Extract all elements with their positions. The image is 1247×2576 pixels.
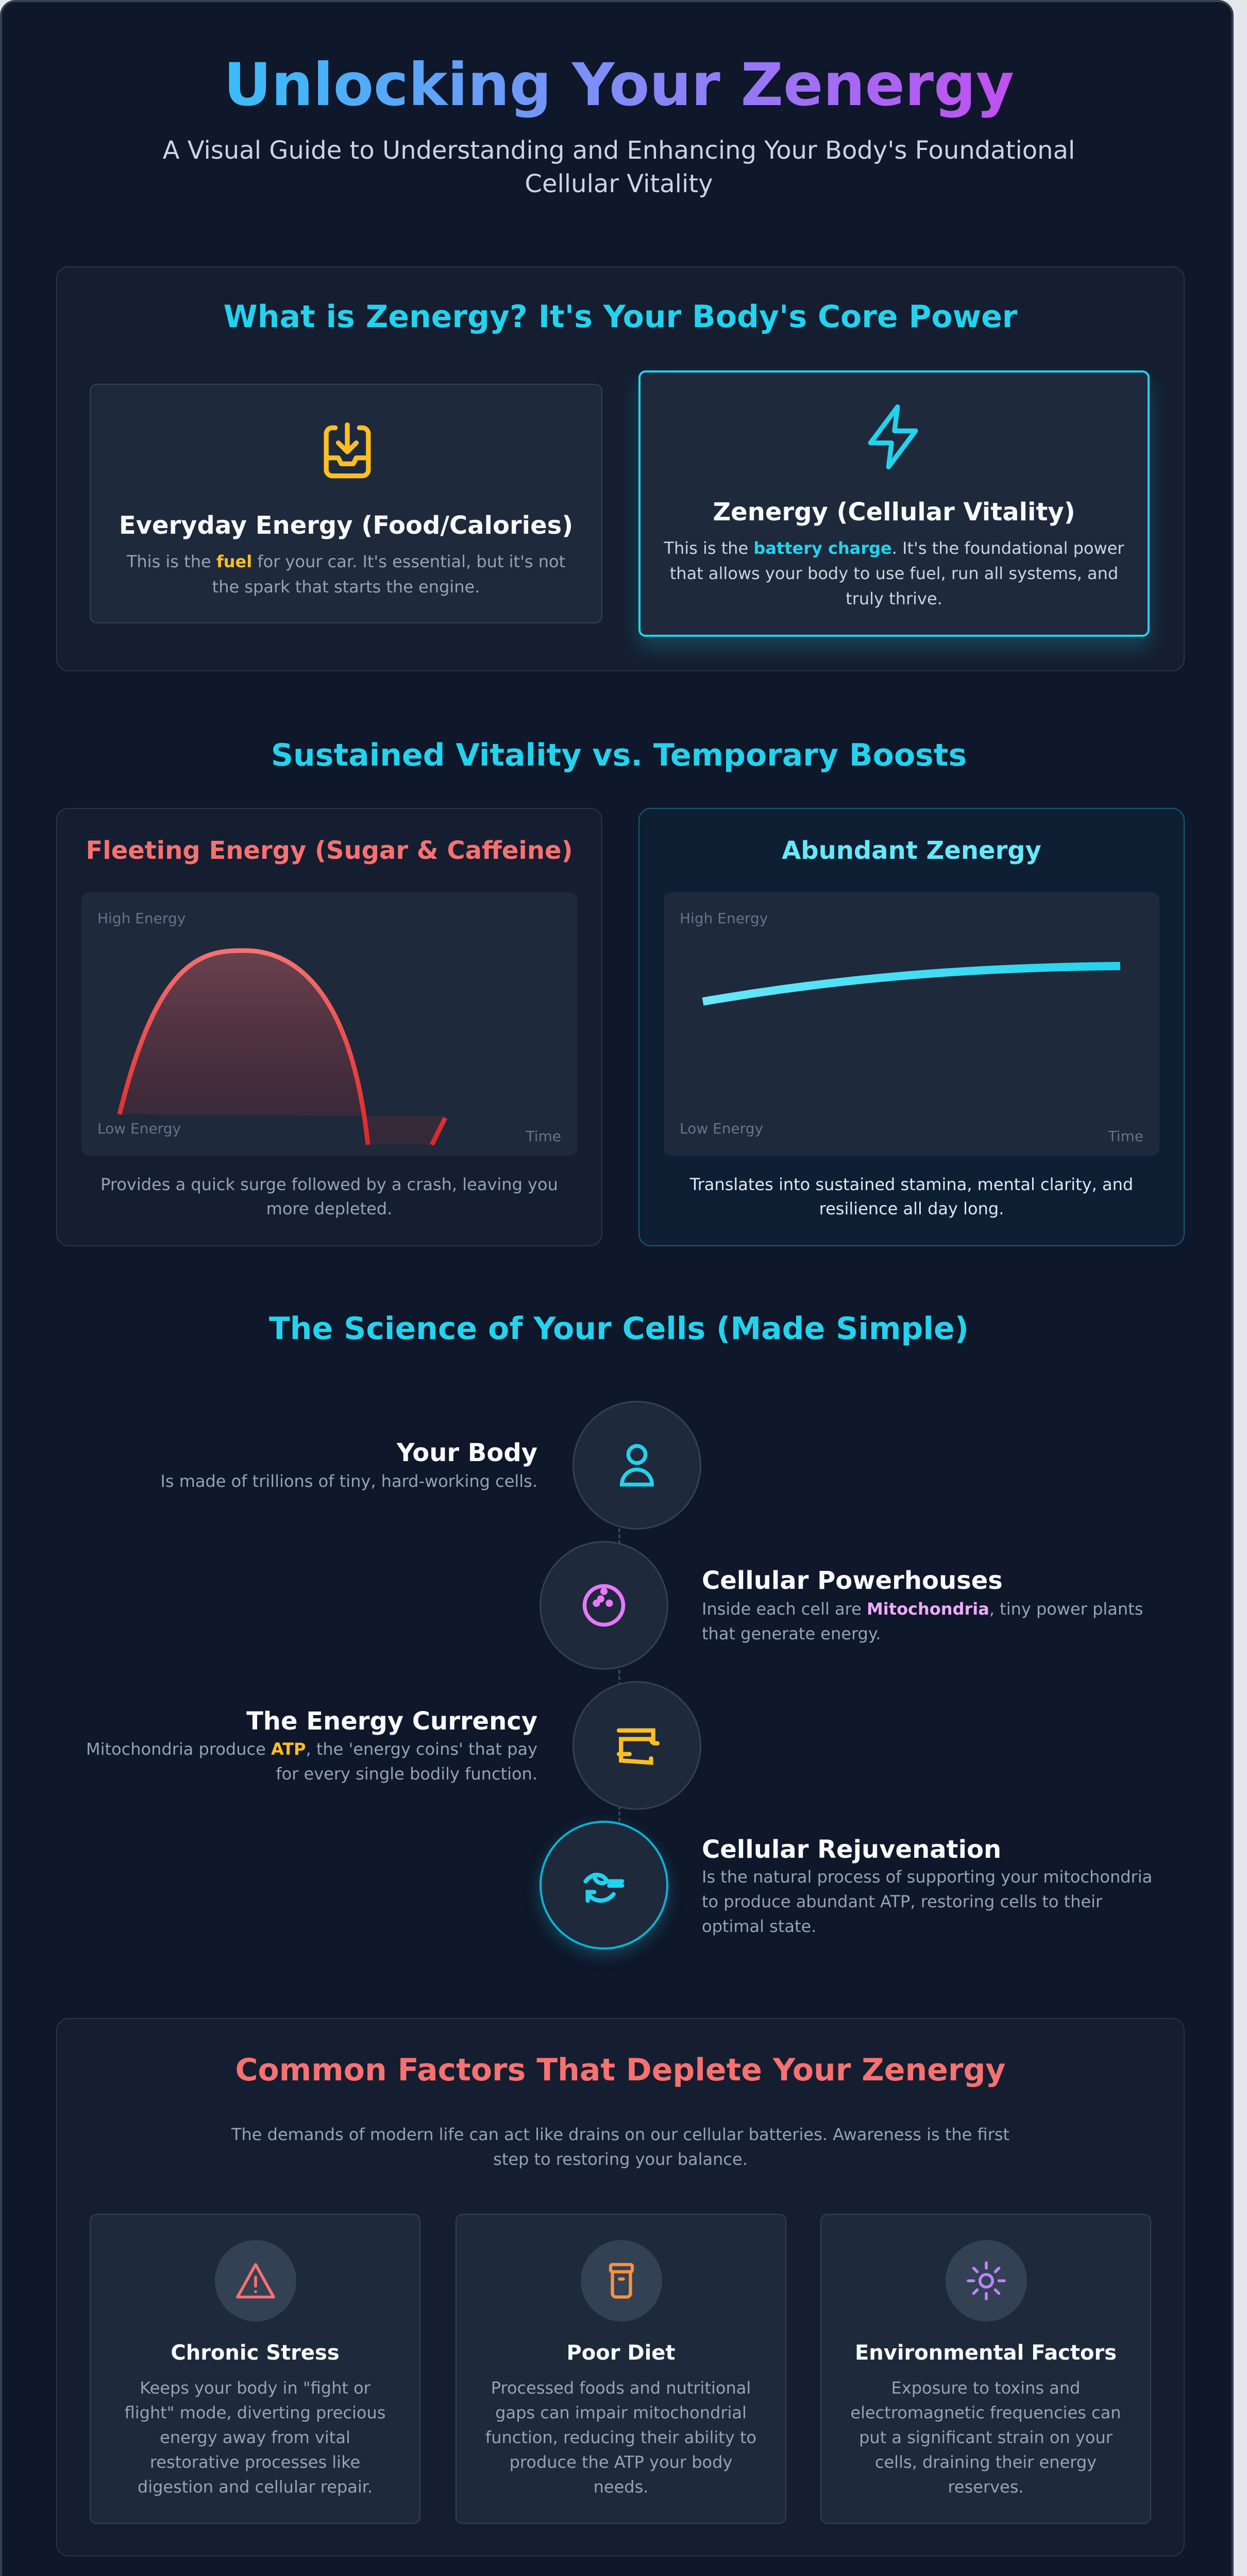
card: poor diet: function, reducing their ability to xyxy=(485,2428,756,2447)
intro text xyxy=(231,2125,1009,2169)
step: cellular rejuvenation: to produce abundant ATP, restoring cells to their xyxy=(702,1892,1102,1911)
intro text: The demands of modern life can act like drains on our cellular batteries. Awareness is the first xyxy=(231,2125,1009,2144)
icon: jar xyxy=(581,2240,662,2321)
card: chronic stress: energy away from vital xyxy=(160,2428,350,2447)
icon: lightning xyxy=(868,404,918,469)
panel: depleting factors xyxy=(56,2018,1185,2556)
heading: Common Factors That Deplete Your Zenergy xyxy=(235,2052,1006,2088)
step: cellular powerhouses: that generate energy. xyxy=(702,1624,881,1643)
card: chronic stress: Keeps your body in "fight or xyxy=(140,2378,370,2398)
card: environmental factors: Environmental Factors xyxy=(855,2341,1117,2365)
step: cellular rejuvenation xyxy=(533,1820,1152,1961)
step: energy currency: The Energy Currency xyxy=(246,1707,537,1736)
card: environmental factors xyxy=(820,2214,1151,2524)
panel text: Translates into sustained stamina, mental clarity, and xyxy=(690,1175,1133,1194)
icon circle: rejuvenation xyxy=(540,1821,668,1950)
chart: crash curve: Time xyxy=(526,1128,561,1145)
heading: what is zenergy: What is Zenergy? It's Your Body's Core Power xyxy=(224,299,1017,335)
step: cellular powerhouses xyxy=(540,1541,1143,1670)
chart: crash curve: Low Energy xyxy=(97,1120,181,1137)
subtitle xyxy=(163,136,1075,198)
card: poor diet xyxy=(456,2214,786,2524)
card text xyxy=(127,552,565,597)
step: cellular rejuvenation: Is the natural process of supporting your mitochondria xyxy=(702,1867,1152,1887)
card: chronic stress: restorative processes like xyxy=(150,2452,360,2472)
card: zenergy cellular vitality xyxy=(638,370,1150,637)
chart: crash curve xyxy=(81,892,577,1156)
card text: truly thrive. xyxy=(846,589,942,608)
card: chronic stress: flight" mode, diverting precious xyxy=(125,2403,385,2422)
card: poor diet: Processed foods and nutritional xyxy=(491,2378,751,2398)
step: energy currency: Mitochondria produce ATP, the 'energy coins' that pay xyxy=(86,1739,537,1759)
subtitle: Cellular Vitality xyxy=(525,170,713,198)
chart: steady line: Low Energy xyxy=(680,1120,763,1137)
step: cellular rejuvenation: optimal state. xyxy=(702,1917,816,1936)
card text: This is the battery charge. It's the foundational power xyxy=(664,538,1124,558)
step: your body xyxy=(160,1401,701,1530)
step: your body: Your Body xyxy=(397,1438,537,1467)
subtitle: A Visual Guide to Understanding and Enhancing Your Body's Foundational xyxy=(163,136,1075,165)
card text xyxy=(664,538,1124,608)
card: poor diet: gaps can impair mitochondrial xyxy=(495,2403,747,2422)
card: environmental factors: cells, draining their energy xyxy=(875,2452,1097,2472)
card text: This is the fuel for your car. It's essential, but it's not xyxy=(127,552,565,571)
card text: the spark that starts the engine. xyxy=(212,577,480,597)
step: your body: Is made of trillions of tiny, hard-working cells. xyxy=(160,1471,537,1491)
icon: sun xyxy=(946,2240,1027,2321)
step: energy currency: for every single bodily function. xyxy=(276,1764,537,1784)
panel text: Provides a quick surge followed by a crash, leaving you xyxy=(100,1175,558,1194)
chart: steady line xyxy=(664,892,1159,1156)
connector line xyxy=(618,1528,620,1822)
card: environmental factors: electromagnetic frequencies can xyxy=(850,2403,1121,2422)
icon: warning xyxy=(215,2240,296,2321)
card: chronic stress xyxy=(90,2214,420,2524)
icon circle: person xyxy=(572,1401,701,1530)
panel: what is zenergy xyxy=(56,266,1185,671)
panel: abundant zenergy xyxy=(638,808,1185,1246)
intro text: step to restoring your balance. xyxy=(493,2149,748,2169)
card: environmental factors: Exposure to toxins and xyxy=(891,2378,1080,2398)
card: everyday energy xyxy=(90,384,602,623)
chart: steady line: Time xyxy=(1108,1128,1143,1145)
icon circle: atp machine xyxy=(572,1681,701,1810)
card: chronic stress: digestion and cellular repair. xyxy=(138,2477,373,2497)
card text: that allows your body to use fuel, run all systems, and xyxy=(670,564,1118,583)
card: chronic stress: Chronic Stress xyxy=(171,2341,340,2365)
step: cellular powerhouses: Cellular Powerhouses xyxy=(702,1566,1003,1595)
card: environmental factors: put a significant strain on your xyxy=(859,2428,1113,2447)
panel: fleeting energy xyxy=(56,808,602,1246)
panel title: Fleeting Energy (Sugar & Caffeine) xyxy=(86,836,573,865)
title: Unlocking Your Zenergy xyxy=(224,50,1014,119)
chart: steady line: High Energy xyxy=(680,910,768,927)
chart: crash curve: High Energy xyxy=(97,910,186,927)
card title: Everyday Energy (Food/Calories) xyxy=(119,511,573,540)
card: poor diet: Poor Diet xyxy=(566,2341,676,2365)
card: poor diet: produce the ATP your body xyxy=(510,2452,732,2472)
heading: science of cells: The Science of Your Cells (Made Simple) xyxy=(269,1311,969,1347)
panel text: resilience all day long. xyxy=(819,1199,1004,1218)
step: energy currency xyxy=(86,1681,701,1810)
card: environmental factors: reserves. xyxy=(948,2477,1024,2497)
card: poor diet: needs. xyxy=(594,2477,648,2497)
panel text xyxy=(100,1175,558,1218)
heading: sustained vitality: Sustained Vitality vs. Temporary Boosts xyxy=(271,737,967,773)
icon circle: mitochondria xyxy=(540,1541,668,1670)
card title: Zenergy (Cellular Vitality) xyxy=(713,498,1075,527)
icon: inbox download xyxy=(324,422,371,478)
panel text: more depleted. xyxy=(266,1199,392,1218)
step: cellular powerhouses: Inside each cell are Mitochondria, tiny power plants xyxy=(702,1599,1143,1619)
panel title: Abundant Zenergy xyxy=(782,836,1041,865)
panel text xyxy=(689,1175,1133,1218)
step: cellular rejuvenation: Cellular Rejuvenation xyxy=(702,1835,1001,1864)
